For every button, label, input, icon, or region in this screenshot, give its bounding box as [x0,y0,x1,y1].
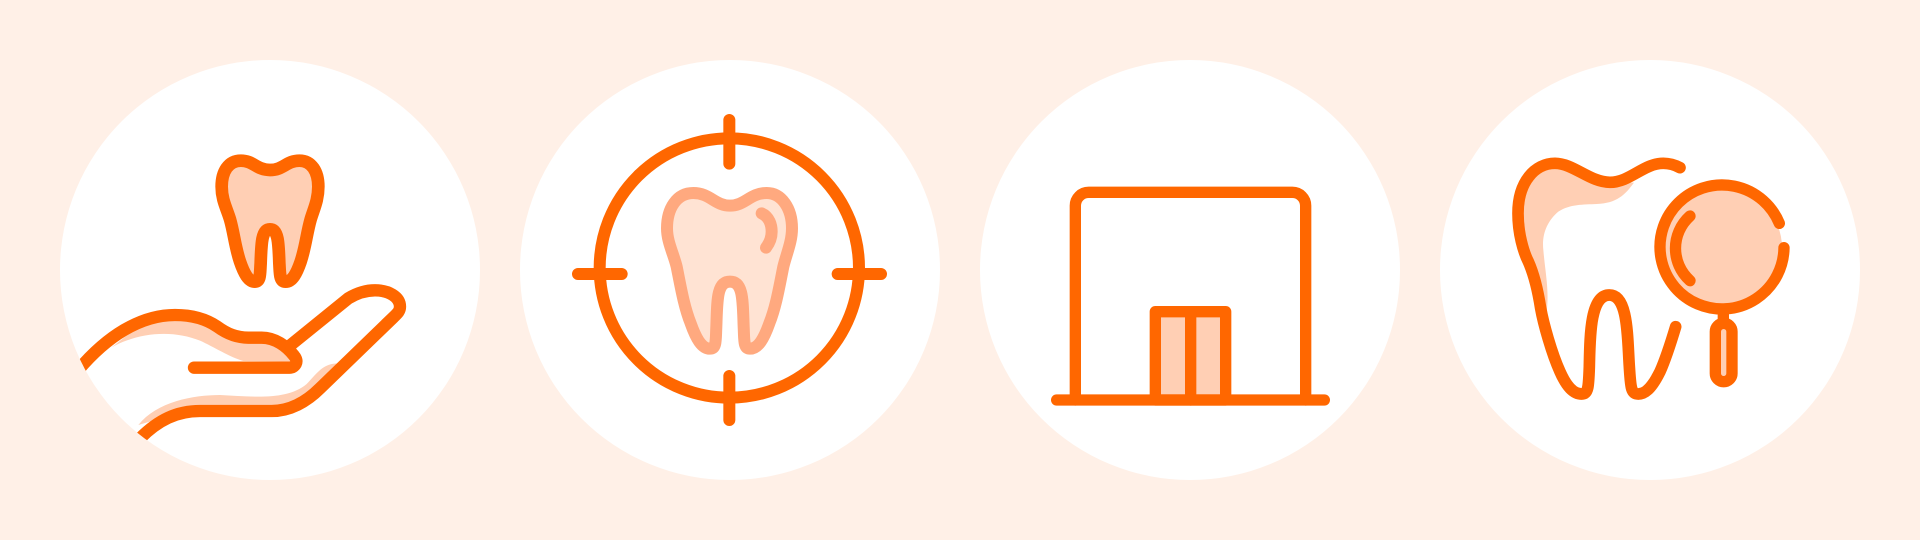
icon: hand [78,290,400,438]
infographic canvas [60,60,1860,480]
icon: tooth outline [1517,163,1680,394]
icon: building with door [1057,192,1324,400]
icon: crosshair target [578,120,881,420]
panel: clinic building [980,60,1400,480]
icon: tooth [222,161,318,282]
panel: targeted tooth [520,60,940,480]
panel: tooth on hand [60,60,480,480]
panel: tooth under magnifier [1440,60,1860,480]
icon: magnifying glass [1660,185,1784,382]
icon: faded tooth [667,193,792,349]
